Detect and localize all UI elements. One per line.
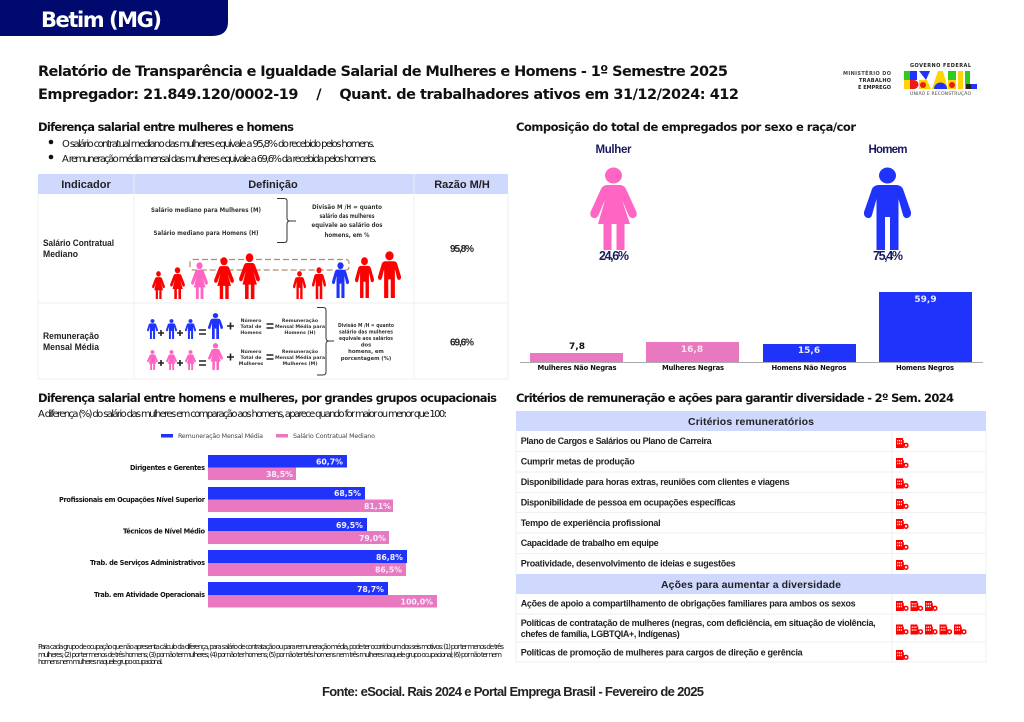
chart description: A diferença (%) do salário das mulheres em comparação aos homens, aparece quando for maior ou menor que 100:	[38, 408, 447, 420]
logos: ministry and federal government: GOVERNO FEDERAL	[910, 63, 972, 69]
bar chart: occupational groups: Trab. em Atividade Operacionais	[94, 591, 205, 599]
header tab: Betim (MG): Betim (MG)	[41, 8, 162, 32]
bar chart: occupational groups: Trab. de Serviços Administrativos	[90, 559, 205, 567]
bar chart: occupational groups: 38,5%	[266, 470, 293, 479]
diagram: average pay definition: Total de	[241, 324, 261, 330]
table section headers: Ações para aumentar a diversidade	[661, 579, 841, 591]
table row labels: Cumprir metas de produção	[521, 456, 635, 466]
report title: Relatório de Transparência e Igualdade Salarial de Mulheres e Homens - 1º Semestre 2025	[38, 64, 728, 80]
diagram: average pay definition: salário das mulheres	[339, 328, 393, 336]
diagram: average pay definition: Total de	[241, 355, 261, 361]
bar chart: occupational groups: Profissionais em Ocupações Nível Superior	[59, 496, 206, 504]
logos: ministry and federal government: MINISTÉRIO DO	[843, 69, 891, 77]
bar chart: composition by sex and race: 59,9	[914, 295, 937, 305]
bar chart: composition by sex and race: 15,6	[798, 346, 820, 356]
chart legend: Remuneração Mensal Média	[178, 432, 263, 440]
diagram: average pay definition: Divisão M /H = quanto	[338, 323, 394, 329]
bar chart: composition by sex and race	[520, 292, 983, 372]
bar chart: occupational groups: 86,5%	[375, 566, 402, 574]
diagram: average pay definition: dos	[361, 342, 371, 348]
report title	[38, 64, 739, 103]
diagram: average pay definition: Mulheres	[239, 361, 263, 367]
table row labels: Políticas de contratação de mulheres (negras, com deficiência, em situação de violência,	[521, 618, 876, 628]
row label: remuneração mensal média: Mensal Média	[43, 342, 100, 353]
bullet summary: A remuneração média mensal das mulheres equivale a 69,6% da recebida pelos homens.	[62, 153, 377, 165]
diagram: average pay definition: Homens (H)	[284, 330, 316, 336]
row label: remuneração mensal média: Remuneração	[43, 331, 99, 342]
table row labels: Ações de apoio a compartilhamento de obrigações familiares para ambos os sexos	[521, 598, 856, 608]
row label: salário contratual mediano: Salário Contratual	[43, 238, 114, 249]
diagram: average pay definition: Remuneração	[282, 318, 319, 324]
footnote: mulheres; (2) por ter menos de três homens; (3) por não ter mulheres; (4) por não ter homens; (5) por não ter três homens nem três mulheres naquele grupo ocupacional; (6) por não ter nem	[38, 650, 502, 659]
bar chart: occupational groups: Técnicos de Nível Médio	[123, 528, 205, 536]
diagram: median salary definition: Salário mediano para Homens (H)	[154, 230, 259, 237]
figure: homem 75,4%	[864, 144, 911, 263]
table header labels: Definição	[248, 179, 298, 191]
table row labels: Disponibilidade para horas extras, reuniões com clientes e viagens	[521, 477, 790, 487]
figure: mulher 24,6%	[590, 144, 637, 263]
table row labels: Capacidade de trabalho em equipe	[521, 538, 659, 548]
diagram: average pay definition	[147, 308, 394, 375]
diagram: median salary definition: salário das mulheres	[320, 213, 375, 220]
bar chart: composition by sex and race: Homens Negros	[896, 364, 954, 372]
diagram: average pay definition: Mensal Média para	[275, 323, 325, 330]
table row labels: Disponibilidade de pessoa em ocupações específicas	[521, 498, 736, 508]
diagram: median salary definition: equivale ao salário dos	[312, 222, 383, 229]
bullet summary	[49, 138, 377, 165]
diagram: average pay definition: Número	[241, 317, 262, 324]
row label: salário contratual mediano: Mediano	[43, 249, 78, 260]
diagram: average pay definition: porcentagem (%)	[341, 356, 391, 362]
table row labels: Políticas de promoção de mulheres para cargos de direção e gerência	[521, 648, 804, 658]
diagram: average pay definition: Remuneração	[282, 349, 319, 355]
diagram: average pay definition: equivale aos salários	[339, 335, 393, 342]
diagram: average pay definition: homens, em	[348, 349, 384, 355]
bar chart: occupational groups: 81,1%	[364, 502, 391, 511]
chart legend: Salário Contratual Mediano	[293, 432, 375, 440]
panel: criteria and diversity table	[516, 411, 986, 662]
ratio values: 69,6%	[450, 338, 474, 348]
diagram: average pay definition: Número	[241, 348, 262, 355]
figure: mulher 24,6%: 24,6%	[599, 249, 629, 263]
diagram: median salary definition	[151, 198, 401, 299]
logos: ministry and federal government	[843, 63, 977, 97]
bar chart: occupational groups	[59, 455, 437, 608]
table row labels: chefes de família, LGBTQIA+, Indígenas)	[521, 629, 680, 639]
logos: ministry and federal government: UNIÃO E RECONSTRUÇÃO	[910, 90, 971, 97]
bar chart: occupational groups: 69,5%	[336, 521, 363, 530]
footnote: homens nem mulheres naquele grupo ocupacional.	[38, 657, 163, 666]
report title: Empregador: 21.849.120/0002-19 / Quant. de trabalhadores ativos em 31/12/2024: 412	[38, 87, 739, 103]
diagram: median salary definition: Salário mediano para Mulheres (M)	[151, 207, 261, 214]
table row labels: Tempo de experiência profissional	[521, 518, 661, 528]
diagram: average pay definition: Mensal Média para	[275, 354, 325, 361]
bar chart: composition by sex and race: Mulheres Não Negras	[538, 364, 616, 372]
bar chart: occupational groups: 86,8%	[376, 553, 403, 562]
section heading: salary difference: Diferença salarial entre mulheres e homens	[38, 120, 294, 134]
diagram: median salary definition: homens, em %	[324, 232, 370, 239]
bar chart: occupational groups: 68,5%	[334, 489, 361, 498]
bar chart: occupational groups: 60,7%	[316, 458, 343, 466]
section heading: occupational groups: Diferença salarial entre homens e mulheres, por grandes grupos ocupacionais	[38, 391, 497, 405]
table row labels: Proatividade, desenvolvimento de ideias e sugestões	[521, 558, 736, 568]
table header labels	[61, 179, 490, 191]
ratio values: 95,8%	[450, 244, 474, 255]
figure: homem 75,4%: Homem	[868, 144, 908, 156]
bar chart: composition by sex and race: Homens Não Negros	[772, 364, 846, 372]
figure: mulher 24,6%: Mulher	[596, 144, 632, 156]
diagram: median salary definition: Divisão M /H = quanto	[312, 204, 382, 211]
row label: remuneração mensal média	[43, 331, 100, 353]
table header labels: Razão M/H	[434, 179, 490, 191]
table row labels	[521, 436, 876, 658]
table row labels: Plano de Cargos e Salários ou Plano de Carreira	[521, 436, 713, 446]
bar chart: occupational groups: 100,0%	[401, 598, 433, 606]
bar chart: composition by sex and race: Mulheres Negras	[662, 364, 724, 372]
bullet summary: O salário contratual mediano das mulheres equivale a 95,8% do recebido pelos homens.	[62, 138, 375, 150]
logos: ministry and federal government: TRABALHO	[859, 78, 891, 84]
section heading: composition: Composição do total de empregados por sexo e raça/cor	[516, 120, 856, 134]
panel: indicator table	[38, 174, 508, 379]
bar chart: composition by sex and race: 16,8	[681, 345, 703, 355]
bar chart: occupational groups: 78,7%	[357, 585, 384, 594]
row label: salário contratual mediano	[43, 238, 114, 260]
diagram: average pay definition: Homens	[240, 330, 262, 336]
diagram: average pay definition: Mulheres (M)	[282, 361, 318, 367]
bar chart: occupational groups: Dirigentes e Gerentes	[130, 464, 205, 472]
ratio values	[450, 244, 474, 348]
figure: homem 75,4%: 75,4%	[873, 249, 903, 263]
table section headers	[661, 416, 841, 591]
footnote: Para cada grupo de ocupação que não apresenta cálculo da diferença, para salário de contratação ou para remuneração média, pode ter ocorrido um dos seis motivos: (1) por ter menos de três	[38, 642, 504, 651]
company icons	[896, 438, 966, 660]
bar chart: composition by sex and race: 7,8	[569, 342, 585, 352]
logos: ministry and federal government: E EMPREGO	[858, 85, 891, 91]
table header labels: Indicador	[61, 179, 111, 191]
footnote	[38, 642, 504, 666]
header tab: Betim (MG)	[0, 0, 228, 36]
bar chart: occupational groups: 79,0%	[359, 534, 386, 543]
section heading: criteria: Critérios de remuneração e ações para garantir diversidade - 2º Sem. 2024	[516, 391, 954, 405]
chart legend	[161, 432, 375, 440]
source line: Fonte: eSocial. Rais 2024 e Portal Emprega Brasil - Fevereiro de 2025	[322, 684, 704, 699]
table section headers: Critérios remuneratórios	[688, 416, 814, 428]
